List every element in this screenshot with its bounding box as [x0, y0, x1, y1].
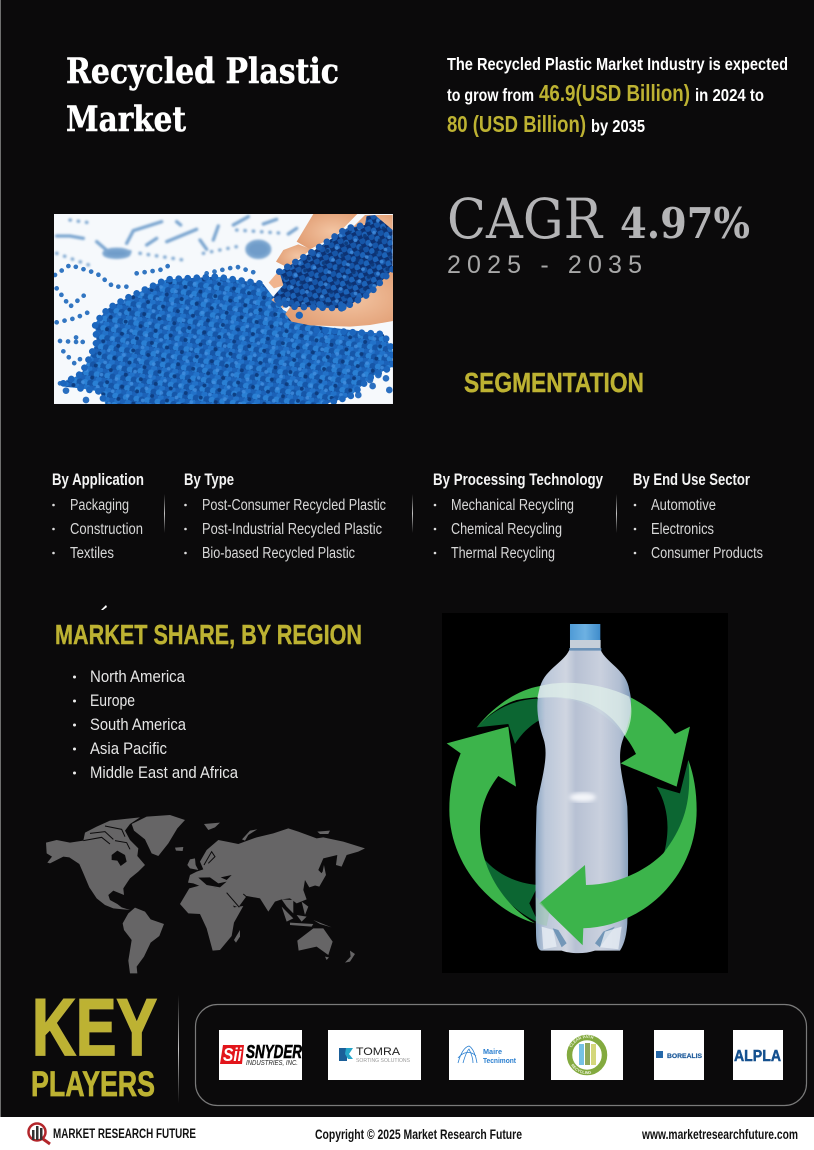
intro text: market forecast	[447, 54, 788, 137]
logo: Market Research Future	[28, 1124, 196, 1144]
logo: Maire Tecnimont: Maire	[483, 1047, 502, 1056]
logo: Tomra: SORTING SOLUTIONS	[356, 1058, 410, 1064]
segmentation column: by end use sector	[633, 471, 763, 562]
segmentation column: by type: Bio-based Recycled Plastic	[202, 545, 355, 562]
logo: Maire Tecnimont	[449, 1030, 524, 1080]
CAGR figure	[447, 187, 750, 279]
logo: Borealis	[654, 1030, 704, 1080]
logo: Maire Tecnimont: Tecnimont	[483, 1056, 516, 1065]
title: Recycled Plastic	[66, 51, 339, 92]
segmentation column: by end use sector: By End Use Sector	[633, 471, 750, 489]
logo: Market Research Future: MARKET RESEARCH FUTURE	[53, 1126, 196, 1141]
logo: Snyder Industries	[219, 1030, 302, 1080]
pellet pile	[63, 277, 393, 407]
region list: North America	[90, 667, 185, 686]
segmentation column: by application: Packaging	[70, 497, 129, 514]
segmentation column: by application: By Application	[52, 471, 144, 489]
segmentation column: by end use sector: Consumer Products	[651, 545, 763, 562]
key players heading	[31, 983, 157, 1104]
scattered blurred pellets	[57, 217, 297, 267]
intro text: market forecast: 46.9(USD Billion)	[539, 80, 690, 106]
segmentation column: by end use sector: Electronics	[651, 521, 714, 538]
segmentation column: by processing technology: By Processing Technology	[433, 471, 604, 489]
logo: Alpla: ALPLA	[734, 1048, 781, 1065]
logo: Snyder Industries: SNYDER	[246, 1042, 302, 1062]
logo: Clear Path Recycling: CLEAR PATH	[570, 1035, 594, 1048]
key players heading: KEY	[32, 983, 157, 1073]
title: Market	[66, 99, 186, 140]
segmentation column: by application: Textiles	[70, 545, 114, 562]
segmentation column: by processing technology	[433, 471, 604, 562]
CAGR figure: CAGR	[447, 187, 603, 251]
logo: Tomra: TOMRA	[356, 1046, 401, 1058]
recycling arrow: dark shadows	[477, 698, 690, 923]
logo: Alpla	[733, 1030, 783, 1080]
intro text: market forecast: in 2024 to	[695, 85, 764, 105]
segmentation column: by processing technology: Mechanical Recycling	[451, 497, 574, 514]
CAGR figure: 4.97%	[620, 199, 750, 248]
heading: segmentation: SEGMENTATION	[464, 367, 644, 398]
logo: Borealis: BOREALIS	[667, 1053, 703, 1060]
footer bar	[0, 1117, 814, 1150]
title	[66, 51, 339, 140]
segmentation column: by type: Post-Consumer Recycled Plastic	[202, 497, 386, 514]
segmentation column: by application	[52, 471, 144, 562]
image: blue recycled plastic pellets in a hand	[54, 214, 393, 407]
logo: Tomra	[328, 1030, 421, 1080]
segmentation column: by end use sector: Automotive	[651, 497, 716, 514]
region list: Asia Pacific	[90, 739, 167, 758]
hand	[269, 214, 393, 327]
key players panel	[194, 1004, 808, 1106]
recycling arrow: left	[447, 727, 535, 923]
image: plastic bottle with recycling arrows	[442, 613, 728, 973]
intro text: market forecast: to grow from	[447, 85, 534, 105]
segmentation column: by application: Construction	[70, 521, 143, 538]
key players heading: PLAYERS	[31, 1065, 155, 1104]
copyright: Copyright © 2025 Market Research Future	[315, 1126, 522, 1142]
intro text: market forecast: by 2035	[591, 116, 645, 136]
region list: South America	[90, 715, 186, 734]
logo: Clear Path Recycling	[551, 1030, 623, 1080]
segmentation column: by processing technology: Thermal Recycling	[451, 545, 555, 562]
logo: Snyder Industries: INDUSTRIES, INC.	[246, 1060, 298, 1067]
region list: Europe	[90, 691, 135, 710]
intro text: market forecast: 80 (USD Billion)	[447, 111, 586, 137]
heading: market share by region: MARKET SHARE, BY REGION	[55, 619, 362, 650]
region list	[73, 667, 238, 782]
CAGR figure: 2025 - 2035	[447, 251, 642, 279]
logo: Snyder Industries: Sii	[223, 1045, 243, 1065]
recycling arrow: top right	[477, 683, 690, 787]
bottle	[536, 624, 631, 953]
region list: Middle East and Africa	[90, 763, 238, 782]
world map	[46, 815, 365, 973]
recycling arrow: bottom	[539, 760, 697, 945]
segmentation column: by processing technology: Chemical Recycling	[451, 521, 562, 538]
segmentation column: by type: By Type	[184, 471, 234, 489]
segmentation column: by type	[184, 471, 386, 562]
segmentation column: by type: Post-Industrial Recycled Plastic	[202, 521, 382, 538]
pellets held in hand	[273, 215, 393, 319]
logo: Clear Path Recycling: RECYCLING	[571, 1064, 592, 1074]
